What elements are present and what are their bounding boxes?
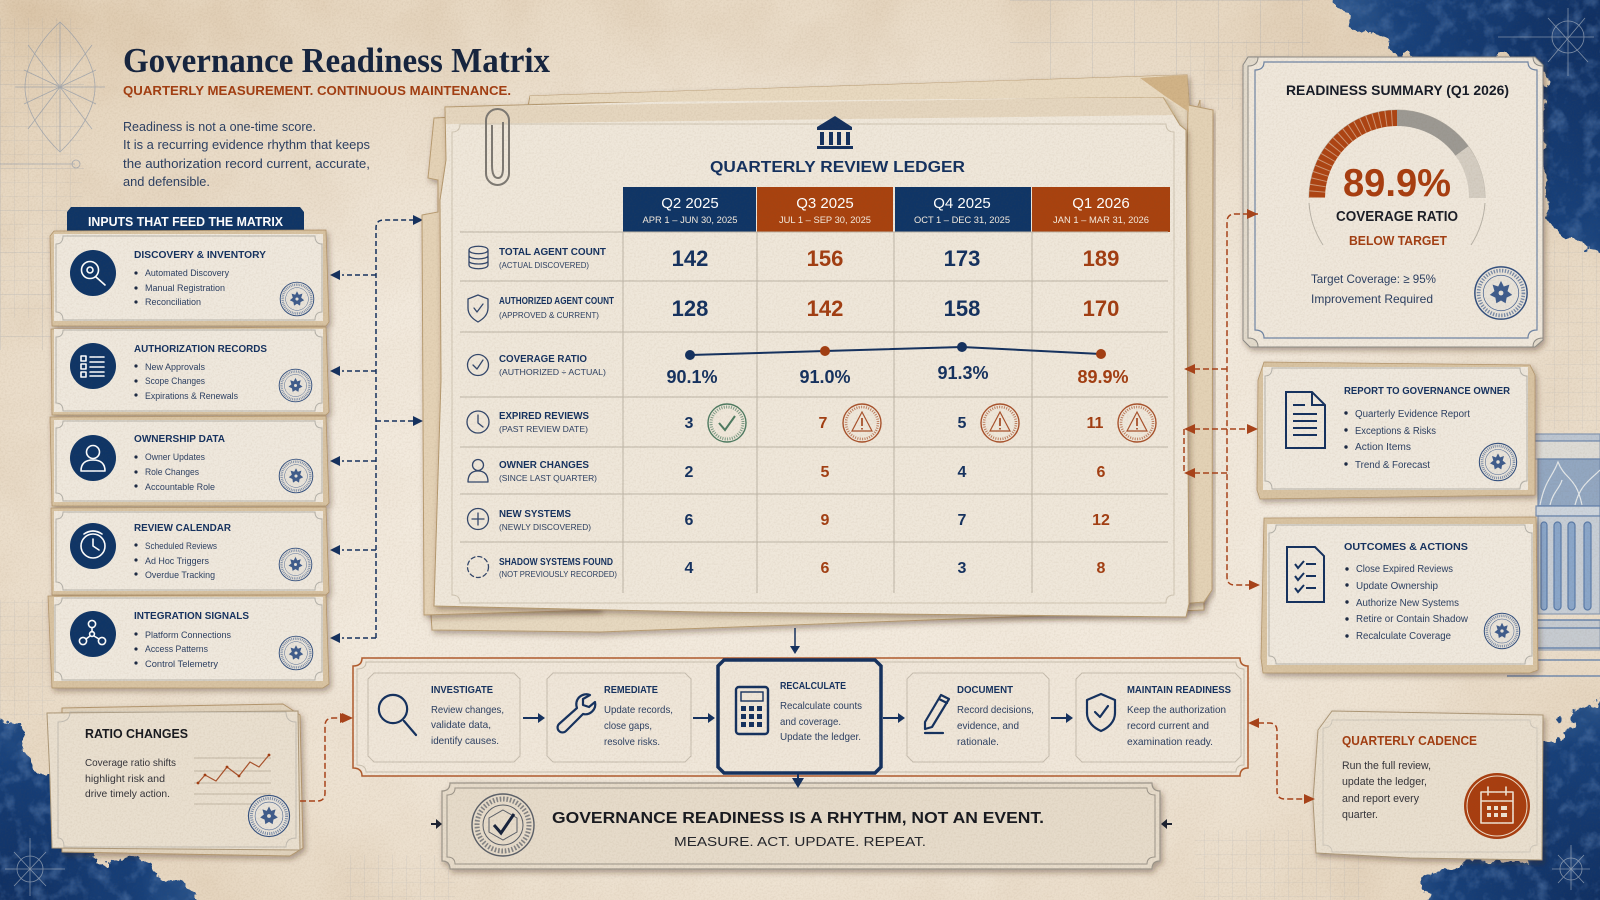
list: Scope Changes: [145, 376, 205, 387]
row: owner changes: (SINCE LAST QUARTER): [499, 473, 597, 483]
step: investigate: validate data,: [431, 719, 491, 731]
step: document: rationale.: [957, 736, 999, 748]
heading: RATIO CHANGES: [85, 726, 188, 741]
text block: highlight risk and: [85, 773, 165, 785]
icon: checklist: [70, 343, 116, 389]
seal: [279, 636, 313, 670]
row: shadow systems found: [468, 556, 1106, 579]
row: coverage ratio with line chart: 89.9%: [1077, 367, 1129, 387]
connector: process to cadence: [340, 713, 1315, 804]
heading: OWNERSHIP DATA: [134, 433, 225, 445]
row: authorized agent count: (APPROVED & CURRENT): [499, 310, 599, 320]
text block: [1342, 760, 1431, 821]
step: recalculate: RECALCULATE: [780, 680, 846, 692]
step: investigate: [368, 673, 520, 762]
target text: [1311, 272, 1436, 306]
stamp: warning Q3: [843, 404, 881, 442]
row: total agent count: 173: [944, 246, 980, 271]
step: maintain readiness: MAINTAIN READINESS: [1127, 684, 1231, 696]
row: authorized agent count: 170: [1083, 296, 1119, 321]
panel: review calendar: [51, 507, 329, 595]
panel: readiness summary: [1243, 57, 1543, 347]
table header: Q4 2025: [933, 195, 991, 212]
panel: discovery & inventory: [50, 230, 329, 326]
table: quarterly review ledger: [460, 187, 1170, 593]
list: Update Ownership: [1356, 581, 1438, 592]
list: Role Changes: [145, 467, 199, 478]
step: document: DOCUMENT: [957, 684, 1014, 696]
seal: [1484, 613, 1520, 649]
row: shadow systems found: 6: [821, 560, 830, 577]
table header: OCT 1 – DEC 31, 2025: [914, 215, 1010, 225]
step: investigate: INVESTIGATE: [431, 684, 493, 696]
row: expired reviews: 3: [685, 415, 694, 432]
list: Close Expired Reviews: [1356, 564, 1453, 575]
list: Control Telemetry: [145, 659, 218, 670]
row: coverage ratio with line chart: 91.0%: [799, 367, 851, 387]
intro text block: and defensible.: [123, 174, 210, 189]
icon: document: [1286, 392, 1325, 448]
row: shadow systems found: SHADOW SYSTEMS FOUND: [499, 557, 613, 568]
row: coverage ratio with line chart: COVERAGE RATIO: [499, 354, 587, 365]
connector: ratio changes to process: [300, 713, 353, 801]
list: Trend & Forecast: [1355, 460, 1430, 471]
panel: process band: [353, 658, 1248, 776]
panel: report to governance owner: [1257, 362, 1535, 499]
step: remediate: [547, 673, 691, 762]
step: remediate: close gaps,: [604, 720, 652, 732]
list: Access Patterns: [145, 644, 208, 655]
step: maintain readiness: Keep the authorization: [1127, 704, 1226, 716]
list: Expirations & Renewals: [145, 391, 238, 402]
list: [134, 541, 217, 581]
seal: [1479, 443, 1517, 481]
step: maintain readiness: [1076, 673, 1241, 762]
text block: and report every: [1342, 793, 1419, 805]
row: total agent count: (ACTUAL DISCOVERED): [499, 260, 589, 270]
subtitle: QUARTERLY MEASUREMENT. CONTINUOUS MAINTENANCE.: [123, 83, 511, 98]
row: owner changes: 4: [958, 464, 967, 481]
row: shadow systems found: 3: [958, 560, 967, 577]
arrow: ledger down to process: [790, 628, 800, 654]
step: recalculate: Recalculate counts: [780, 700, 862, 712]
list: Accountable Role: [145, 482, 215, 493]
intro text block: the authorization record current, accurate,: [123, 156, 370, 171]
step: investigate: identify causes.: [431, 735, 499, 747]
list: Reconciliation: [145, 297, 201, 308]
text block: quarter.: [1342, 809, 1378, 821]
list: Owner Updates: [145, 452, 205, 463]
step: remediate: resolve risks.: [604, 736, 660, 748]
seal: [279, 369, 312, 402]
list: Action Items: [1355, 442, 1411, 453]
row: expired reviews: 7: [819, 415, 828, 432]
panel: authorization records: [51, 327, 329, 415]
intro text block: [123, 119, 370, 189]
icon: network: [70, 611, 116, 657]
row: authorized agent count: 128: [672, 296, 708, 321]
mini line chart: [194, 754, 271, 804]
banner: rhythm statement: [442, 783, 1160, 869]
heading tab: inputs: INPUTS THAT FEED THE MATRIX: [88, 215, 284, 229]
row: owner changes: OWNER CHANGES: [499, 460, 589, 471]
table header: JAN 1 – MAR 31, 2026: [1053, 215, 1149, 225]
text block: [85, 757, 176, 800]
list: Automated Discovery: [145, 268, 229, 279]
table header: [623, 187, 1170, 232]
seal: [1475, 267, 1527, 319]
row: coverage ratio with line chart: [468, 342, 1129, 387]
seal: [279, 459, 313, 493]
text block: Coverage ratio shifts: [85, 757, 176, 769]
list: Quarterly Evidence Report: [1355, 409, 1470, 420]
step: maintain readiness: record current and: [1127, 720, 1209, 732]
step: maintain readiness: examination ready.: [1127, 736, 1213, 748]
step: document: Record decisions,: [957, 704, 1034, 716]
row: authorized agent count: [468, 295, 1119, 322]
row: new systems: 6: [685, 512, 694, 529]
row: total agent count: 156: [807, 246, 843, 271]
row: coverage ratio with line chart: (AUTHORIZED ÷ ACTUAL): [499, 367, 606, 377]
row: expired reviews: [467, 404, 1156, 442]
arrow: recalculate down to banner: [792, 773, 804, 788]
panel: outcomes & actions: [1261, 517, 1538, 673]
panel: ratio changes: [47, 704, 303, 856]
stamp: warning Q4: [981, 404, 1019, 442]
row: new systems: 7: [958, 512, 967, 529]
connector: inputs to ledger: [330, 215, 423, 643]
table header: Q2 2025: [661, 195, 719, 212]
list: Overdue Tracking: [145, 570, 215, 581]
row: expired reviews: (PAST REVIEW DATE): [499, 424, 588, 434]
row: authorized agent count: AUTHORIZED AGENT COUNT: [499, 296, 614, 307]
list: [1344, 409, 1470, 471]
arrows between steps: [523, 713, 1073, 723]
table header: Q1 2026: [1072, 195, 1130, 212]
heading: DISCOVERY & INVENTORY: [134, 249, 266, 261]
list: [134, 452, 215, 493]
list: [1345, 564, 1469, 642]
row: total agent count: 142: [672, 246, 708, 271]
seal: [279, 548, 312, 581]
panel: ownership data: [50, 416, 329, 506]
heading tab: inputs: [67, 207, 304, 238]
panel: integration signals: [48, 595, 329, 688]
heading: REPORT TO GOVERNANCE OWNER: [1344, 385, 1510, 397]
step: remediate: REMEDIATE: [604, 684, 658, 696]
heading: READINESS SUMMARY (Q1 2026): [1286, 82, 1509, 98]
seal: [280, 282, 314, 316]
title: Governance Readiness Matrix: [123, 41, 550, 80]
row: new systems: (NEWLY DISCOVERED): [499, 522, 591, 532]
banner sub-heading: MEASURE. ACT. UPDATE. REPEAT.: [674, 834, 926, 849]
text block: drive timely action.: [85, 788, 170, 800]
heading: AUTHORIZATION RECORDS: [134, 343, 267, 355]
list: Manual Registration: [145, 283, 225, 294]
list: New Approvals: [145, 362, 205, 373]
row: authorized agent count: 158: [944, 296, 980, 321]
heading: INTEGRATION SIGNALS: [134, 610, 249, 622]
row: expired reviews: 11: [1087, 415, 1104, 432]
row: owner changes: 6: [1097, 464, 1106, 481]
arrow: banner side markers: [431, 819, 1172, 829]
step: document: [907, 673, 1049, 762]
row: expired reviews: 5: [958, 415, 967, 432]
icon: checklist document: [1287, 547, 1324, 602]
icon: magnifier: [70, 250, 116, 296]
list: Platform Connections: [145, 630, 231, 641]
status: BELOW TARGET: [1349, 233, 1447, 248]
icon: paperclip: [486, 109, 509, 185]
stamp: on track: [708, 404, 746, 442]
heading: REVIEW CALENDAR: [134, 522, 231, 534]
heading: QUARTERLY CADENCE: [1342, 734, 1477, 748]
target text: Target Coverage: ≥ 95%: [1311, 272, 1436, 286]
icon: clock: [70, 523, 116, 569]
text block: update the ledger,: [1342, 776, 1427, 788]
table header: APR 1 – JUN 30, 2025: [642, 215, 738, 225]
list: Exceptions & Risks: [1355, 426, 1436, 437]
step: investigate: Review changes,: [431, 704, 504, 716]
gauge label: COVERAGE RATIO: [1336, 209, 1458, 225]
row: new systems: 12: [1092, 512, 1110, 529]
step: recalculate: and coverage.: [780, 716, 841, 728]
table header: Q3 2025: [796, 195, 854, 212]
row: coverage ratio with line chart: 90.1%: [666, 367, 718, 387]
row: expired reviews: EXPIRED REVIEWS: [499, 411, 589, 422]
list: [134, 362, 238, 402]
table header: JUL 1 – SEP 30, 2025: [779, 215, 871, 225]
row: owner changes: 2: [685, 464, 694, 481]
row: new systems: [468, 508, 1110, 532]
row: total agent count: [469, 246, 1119, 271]
row: shadow systems found: 4: [685, 560, 694, 577]
intro text block: Readiness is not a one-time score.: [123, 119, 316, 134]
connector: ledger to governance panels: [1184, 209, 1260, 590]
icon: calendar: [1464, 773, 1530, 839]
row: owner changes: 5: [821, 464, 830, 481]
list: [134, 630, 231, 670]
heading: OUTCOMES & ACTIONS: [1344, 541, 1468, 553]
seal with check: [472, 794, 534, 856]
gauge: [1309, 110, 1485, 245]
step: recalculate: Update the ledger.: [780, 731, 861, 743]
list: Scheduled Reviews: [145, 541, 217, 552]
row: total agent count: 189: [1083, 246, 1119, 271]
target text: Improvement Required: [1311, 292, 1433, 306]
row: new systems: NEW SYSTEMS: [499, 509, 571, 520]
decoration: classical column sketch: [1507, 434, 1600, 676]
intro text block: It is a recurring evidence rhythm that keeps: [123, 137, 370, 152]
decoration: compass sketch: [0, 22, 105, 168]
list: Recalculate Coverage: [1356, 631, 1451, 642]
list: [134, 268, 229, 308]
row: shadow systems found: (NOT PREVIOUSLY RECORDED): [499, 569, 617, 579]
value: 89.9%: [1343, 162, 1451, 205]
heading: quarterly review ledger: QUARTERLY REVIEW LEDGER: [710, 159, 965, 176]
text block: Run the full review,: [1342, 760, 1431, 772]
row: shadow systems found: 8: [1097, 560, 1106, 577]
icon: ledger bank building: [817, 116, 853, 149]
list: Ad Hoc Triggers: [145, 556, 209, 567]
row: owner changes: [468, 460, 1106, 483]
row: new systems: 9: [821, 512, 830, 529]
stamp: warning Q1: [1118, 404, 1156, 442]
step: document: evidence, and: [957, 720, 1019, 732]
seal: [248, 795, 290, 837]
row: total agent count: TOTAL AGENT COUNT: [499, 247, 606, 258]
panel: quarterly cadence: [1313, 711, 1543, 860]
icon: person: [70, 435, 116, 481]
row: authorized agent count: 142: [807, 296, 843, 321]
list: Retire or Contain Shadow: [1356, 614, 1469, 625]
row: coverage ratio with line chart: 91.3%: [937, 363, 989, 383]
step: remediate: Update records,: [604, 704, 673, 716]
step: recalculate: [718, 660, 881, 773]
banner heading: GOVERNANCE READINESS IS A RHYTHM, NOT AN EVENT.: [552, 810, 1044, 827]
list: Authorize New Systems: [1356, 598, 1459, 609]
panel: ledger paper stack: [422, 75, 1213, 632]
